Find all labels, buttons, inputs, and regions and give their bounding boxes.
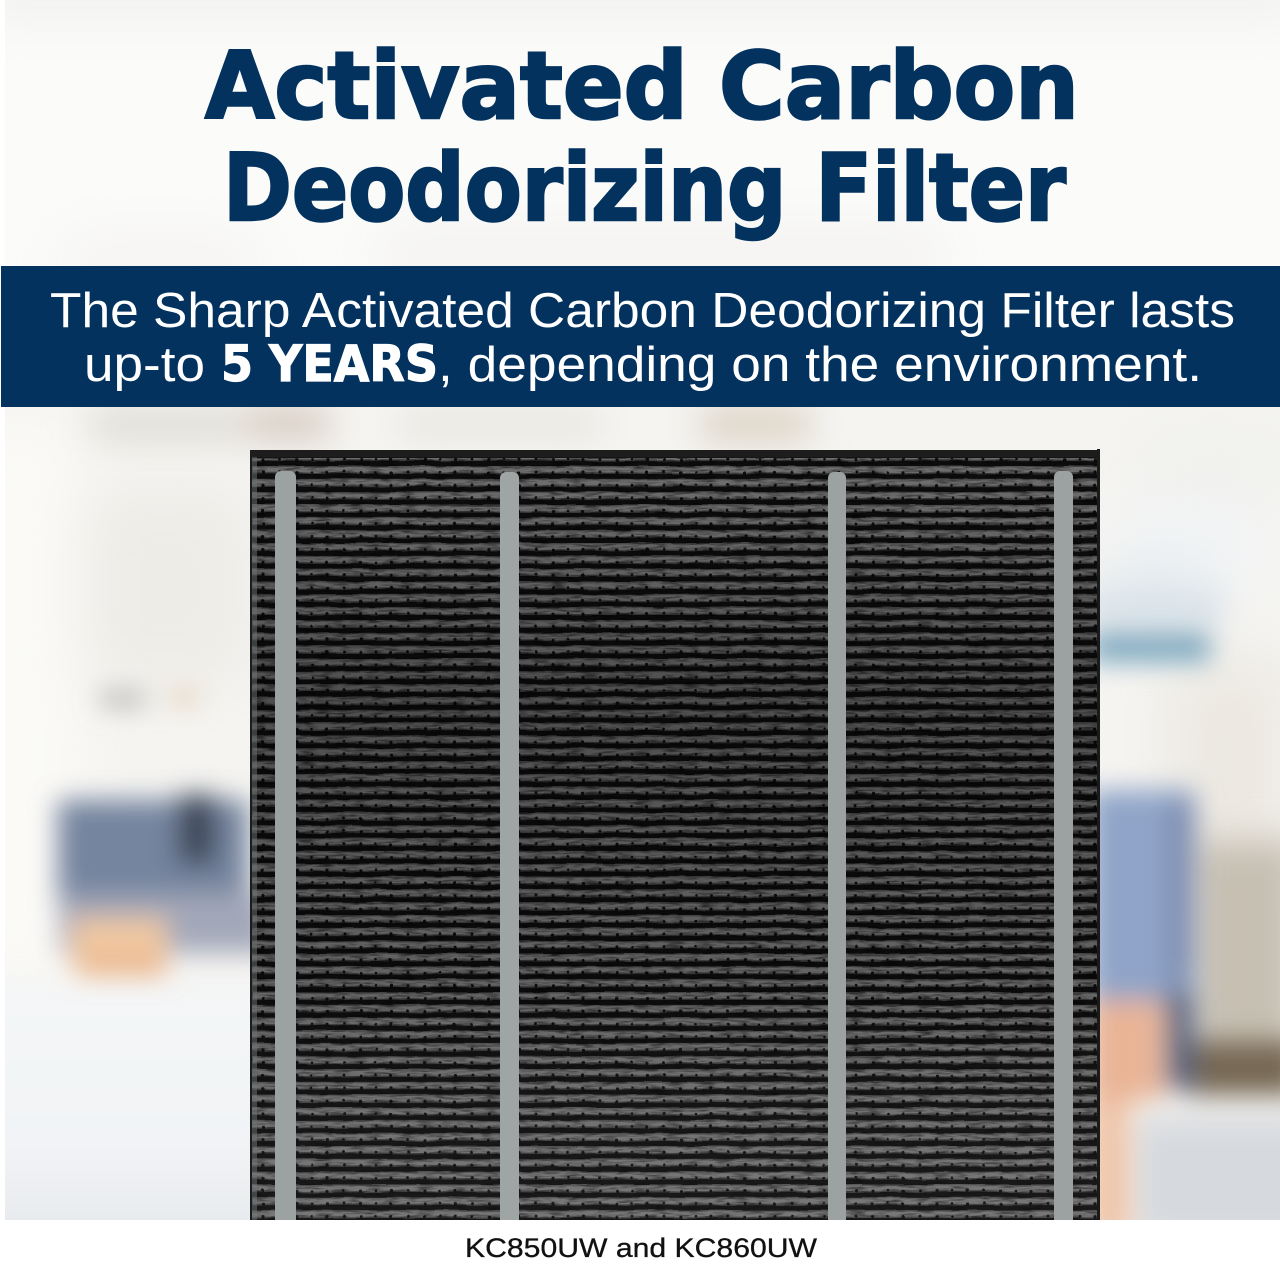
title [205, 32, 1079, 242]
glue strip 3 [828, 472, 846, 1232]
banner: filter lifespan: 5 YEARS [221, 335, 438, 393]
floor, left [5, 1188, 250, 1220]
banner: filter lifespan [1, 266, 1280, 407]
banner: filter lifespan: up-to [84, 338, 205, 392]
title: Activated Carbon [205, 32, 1079, 140]
glue strip 1 [275, 471, 296, 1231]
model caption: KC850UW and KC860UW [465, 1233, 817, 1263]
glue strip 2 [500, 472, 519, 1232]
carbon filter photo [250, 449, 1100, 1232]
title: Deodorizing Filter [223, 134, 1066, 242]
glue strip 4 [1054, 471, 1073, 1231]
banner: filter lifespan: , depending on the environment. [438, 338, 1202, 392]
banner: filter lifespan: The Sharp Activated Carbon Deodorizing Filter lasts [50, 284, 1235, 338]
